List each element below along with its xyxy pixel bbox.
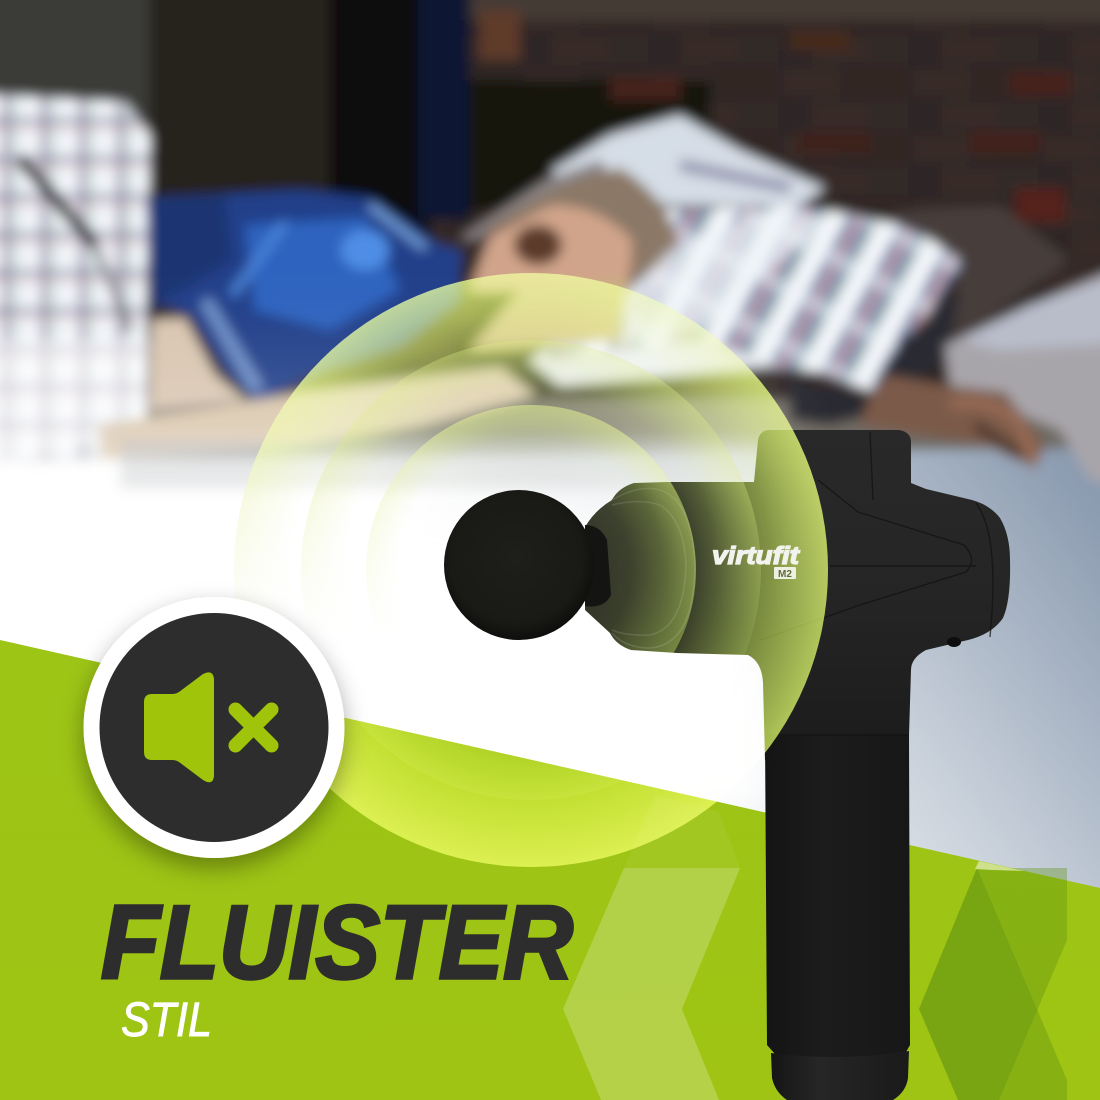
ring edge tint over the pale upper area xyxy=(234,273,828,600)
icon: muted speaker badge xyxy=(84,597,344,858)
face and hair xyxy=(480,168,678,280)
green diagonal panel xyxy=(0,640,1100,1100)
hand on the right xyxy=(860,375,1045,468)
small pale highlight on the edge xyxy=(975,861,1024,871)
white fade over lower left xyxy=(0,300,780,820)
side button hole xyxy=(947,637,961,647)
left plaid pillow xyxy=(0,92,150,480)
mattress xyxy=(0,447,1100,1095)
nose rim lines xyxy=(612,488,695,648)
blue shirt xyxy=(146,190,462,405)
subtitle: STIL: STIL xyxy=(121,994,212,1047)
faint chevron extension xyxy=(624,795,740,868)
title: FLUISTER: FLUISTER xyxy=(101,885,573,1001)
brand logo xyxy=(712,542,801,580)
model badge: M2 xyxy=(778,569,792,580)
top edge of pillow to the head xyxy=(460,160,610,240)
grey haze on bedding xyxy=(120,440,800,490)
massage head neck xyxy=(585,525,611,607)
brand logo: virtufit xyxy=(712,542,801,570)
central plaid pillows xyxy=(552,115,825,205)
walls and curtain xyxy=(0,0,1100,500)
handle grip xyxy=(765,735,910,1058)
speaker glyph xyxy=(144,672,214,782)
mute cross xyxy=(236,710,272,746)
blanket xyxy=(890,205,1070,340)
body contour lines xyxy=(760,432,993,735)
light chevron xyxy=(563,868,740,1100)
dark chevrons xyxy=(919,868,1067,1100)
massage gun body xyxy=(585,430,1010,1100)
right pillow xyxy=(945,250,1100,490)
handle end cap xyxy=(771,1051,909,1100)
bed under the sleeper xyxy=(100,400,1100,520)
sound wave rings xyxy=(234,273,828,867)
massage ball head xyxy=(444,490,594,640)
arm xyxy=(150,318,245,410)
